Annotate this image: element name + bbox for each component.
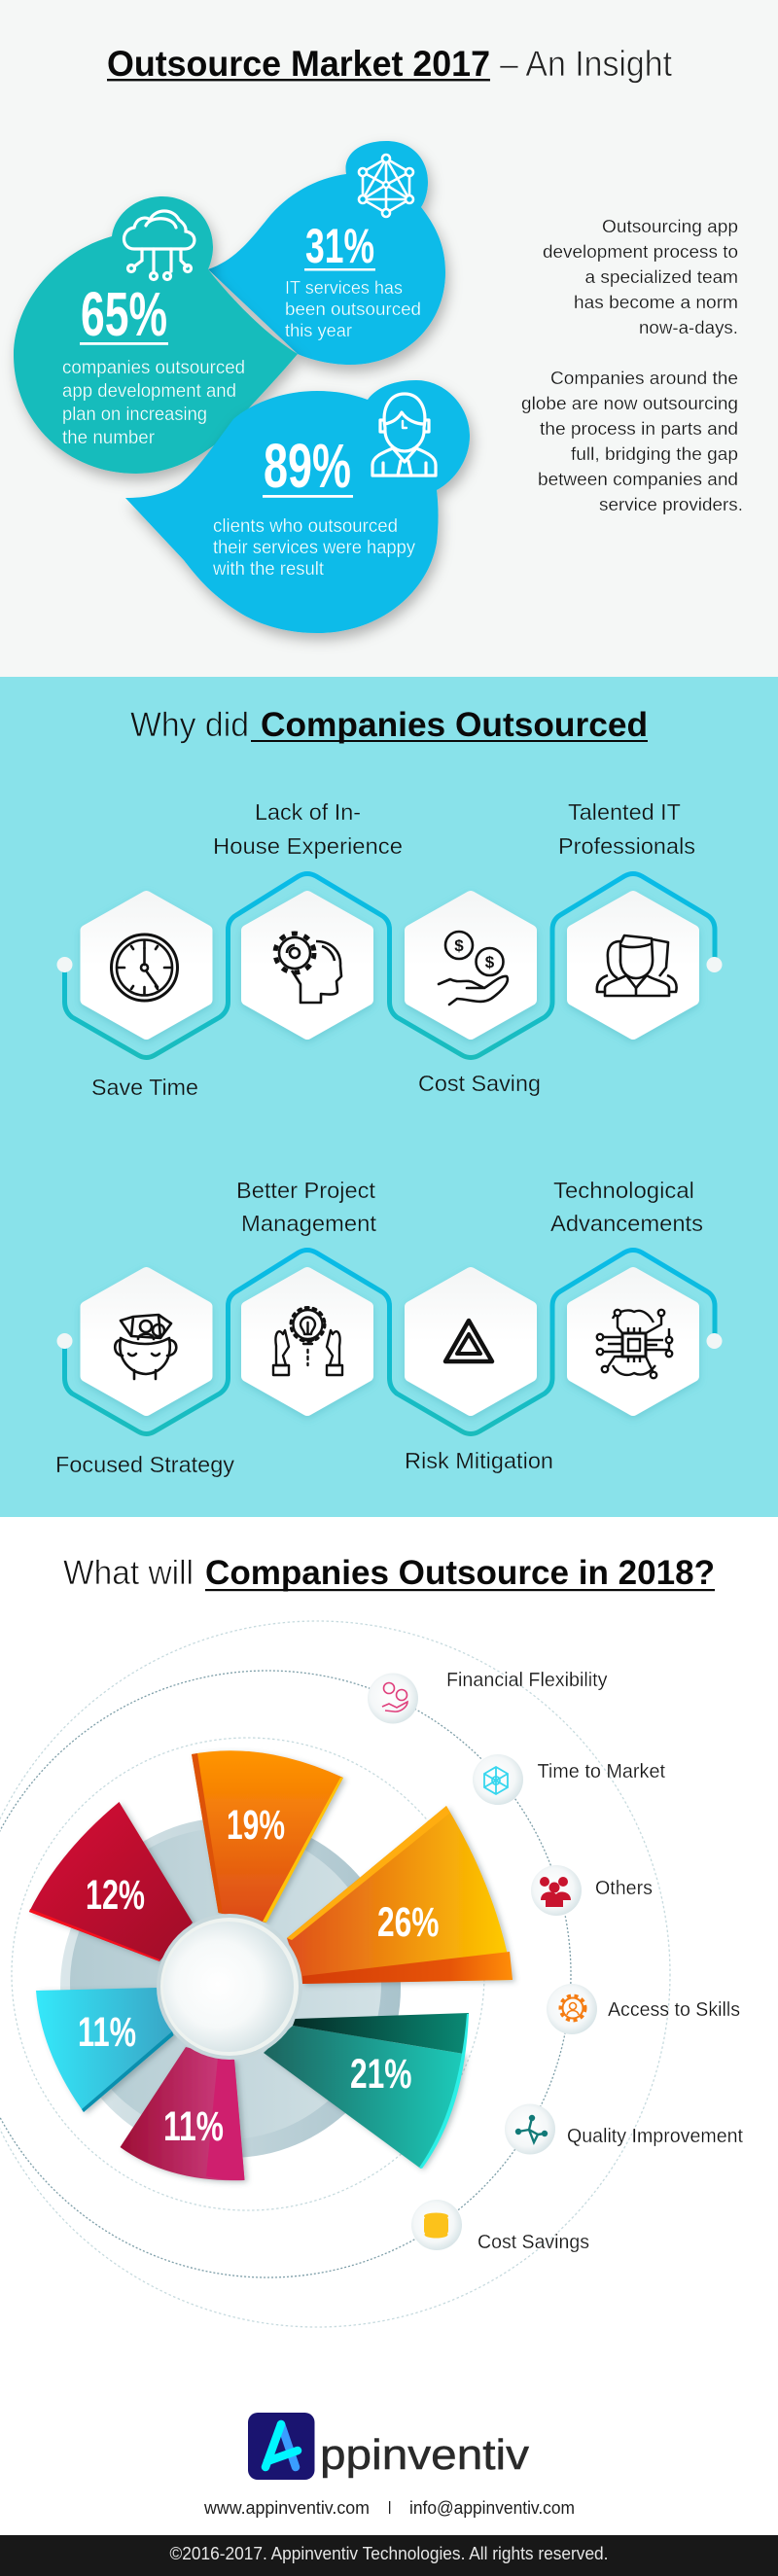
reason: project management bbox=[236, 1178, 377, 1410]
legend: cost savings bbox=[411, 2200, 589, 2253]
text: intro paragraphs: has become a norm bbox=[574, 292, 738, 312]
label: in-house experience: House Experience bbox=[213, 833, 403, 859]
label: talented professionals: Professionals bbox=[558, 833, 695, 859]
text: intro paragraphs: development process to bbox=[543, 241, 738, 262]
text: intro paragraphs: Companies around the bbox=[550, 368, 738, 388]
icon: head with network bbox=[115, 1315, 176, 1379]
text: companies outsourced: the number bbox=[62, 428, 156, 448]
heading: why: Companies Outsourced bbox=[261, 706, 648, 744]
text: companies outsourced bbox=[62, 358, 245, 448]
label: save time: Save Time bbox=[91, 1075, 198, 1100]
text: clients bbox=[212, 516, 415, 580]
copyright: ©2016-2017. Appinventiv Technologies. All rights reserved. bbox=[169, 2543, 609, 2563]
title: Outsource Market 2017 bbox=[107, 44, 490, 84]
connector track: row 2 bbox=[56, 1251, 722, 1433]
icon: coin stack bbox=[424, 2213, 448, 2239]
label: technological advancements: Technological bbox=[553, 1178, 694, 1203]
icon: chip brain bbox=[597, 1310, 672, 1378]
icon: people red bbox=[540, 1877, 571, 1907]
wordmark: ppinventiv bbox=[320, 2431, 529, 2479]
label: cost saving: Cost Saving bbox=[418, 1071, 541, 1096]
blob: 89% clients bbox=[125, 380, 470, 633]
label: project management: Management bbox=[241, 1211, 377, 1236]
legend: financial flexibility bbox=[368, 1670, 607, 1723]
label: project management: Better Project bbox=[236, 1178, 376, 1203]
label: quality improvement: Quality Improvement bbox=[567, 2126, 743, 2147]
logo bbox=[248, 2413, 529, 2480]
heading: 2018: What will bbox=[63, 1554, 194, 1592]
label: technological advancements bbox=[550, 1178, 703, 1236]
panel: market overview bbox=[0, 0, 778, 677]
text: companies outsourced: app development and bbox=[62, 381, 236, 402]
blob: 65% app development bbox=[14, 196, 298, 474]
wedge: 26%: 26% bbox=[377, 1899, 440, 1946]
contact line: info@appinventiv.com bbox=[409, 2498, 575, 2518]
stat: 65% bbox=[80, 279, 168, 349]
label: in-house experience bbox=[213, 799, 403, 859]
label: focused strategy: Focused Strategy bbox=[55, 1452, 235, 1477]
wedge: 12%: 12% bbox=[86, 1872, 145, 1919]
reason: save time bbox=[86, 897, 206, 1100]
label: talented professionals: Talented IT bbox=[568, 799, 681, 825]
wedge: 26% bbox=[287, 1806, 513, 1984]
icon: coins and hand: $ bbox=[454, 936, 464, 955]
wedge: 21%: 21% bbox=[350, 2051, 412, 2098]
legend: access to skills bbox=[547, 1984, 740, 2034]
text: companies outsourced: companies outsourced bbox=[62, 358, 245, 378]
reason: in-house experience bbox=[213, 799, 403, 1034]
pie chart bbox=[29, 1750, 513, 2180]
wedge: 19%: 19% bbox=[227, 1802, 285, 1849]
text: intro paragraphs: a specialized team bbox=[585, 266, 738, 287]
panel: what will companies outsource bbox=[0, 1517, 778, 2535]
icon: double triangle bbox=[445, 1321, 492, 1361]
text: intro paragraphs: full, bridging the gap bbox=[571, 443, 738, 464]
label: financial flexibility: Financial Flexibility bbox=[446, 1670, 607, 1691]
icon: nodes teal bbox=[516, 2116, 547, 2142]
icon: coins and hand: $ bbox=[485, 953, 495, 971]
reason: cost saving bbox=[410, 897, 541, 1096]
wedge: 12% bbox=[29, 1802, 193, 1961]
text: intro paragraphs: globe are now outsourcing bbox=[521, 393, 738, 413]
icon: coins and hand bbox=[439, 932, 508, 1005]
reason: talented professionals bbox=[558, 799, 695, 1034]
text: intro paragraphs: Outsourcing app bbox=[602, 216, 738, 236]
label: time to market: Time to Market bbox=[537, 1761, 665, 1782]
icon: businessman bbox=[372, 394, 436, 476]
text: intro paragraphs bbox=[521, 216, 743, 514]
icon: cloud circuit bbox=[124, 211, 194, 280]
text: intro paragraphs: now-a-days. bbox=[639, 317, 738, 337]
legend: quality improvement bbox=[505, 2104, 743, 2155]
text: clients: with the result bbox=[212, 559, 325, 580]
dotted orbit rings bbox=[0, 1621, 670, 2327]
icon: gear head bbox=[275, 934, 341, 1003]
stat: 31%: 31% bbox=[305, 219, 374, 273]
icon: coins hand pink bbox=[382, 1682, 407, 1711]
text: clients: clients who outsourced bbox=[213, 516, 398, 537]
reason: focused strategy bbox=[55, 1273, 235, 1477]
icon: hexagon cluster bbox=[484, 1767, 508, 1794]
label: access to skills: Access to Skills bbox=[608, 1999, 740, 2021]
footer bar bbox=[0, 2535, 778, 2576]
legend: time to market bbox=[473, 1754, 665, 1805]
wedge: 11% pink: 11% bbox=[163, 2103, 224, 2150]
text: intro paragraphs: the process in parts and bbox=[540, 418, 738, 439]
contact line bbox=[203, 2498, 575, 2518]
panel: why companies outsourced bbox=[0, 677, 778, 1517]
stat: 89%: 89% bbox=[264, 431, 351, 501]
wedge: 11% cyan bbox=[36, 1988, 173, 2112]
text: IT services: IT services has bbox=[285, 278, 403, 298]
icon: bulb and hands bbox=[273, 1307, 342, 1375]
label: others: Others bbox=[595, 1878, 653, 1899]
text: intro paragraphs: service providers. bbox=[599, 494, 743, 514]
blob: 31% IT services bbox=[208, 141, 445, 365]
label: talented professionals bbox=[558, 799, 695, 859]
text: IT services: this year bbox=[285, 321, 352, 340]
text: IT services bbox=[285, 278, 421, 340]
wedge: 21% bbox=[264, 2013, 469, 2169]
connector end dots: row 1 bbox=[56, 957, 722, 972]
icon: team bbox=[597, 935, 677, 996]
chart base disc bbox=[60, 1817, 401, 2158]
label: risk mitigation: Risk Mitigation bbox=[405, 1448, 553, 1473]
wedge: 11% cyan: 11% bbox=[78, 2009, 136, 2056]
text: IT services: been outsourced bbox=[285, 300, 421, 319]
heading: 2018: Companies Outsource in 2018? bbox=[205, 1554, 715, 1592]
chart hub bbox=[157, 1914, 302, 2060]
connector track: row 1 bbox=[64, 873, 715, 1058]
icon: network bbox=[359, 155, 413, 217]
wedge: 19% bbox=[192, 1750, 343, 1923]
wedge: 11% pink bbox=[121, 2047, 245, 2180]
reason: technological advancements bbox=[550, 1178, 703, 1410]
label: project management bbox=[236, 1178, 377, 1236]
contact line: www.appinventiv.com bbox=[203, 2498, 370, 2518]
icon: gear orange bbox=[560, 1995, 585, 2021]
label: technological advancements: Advancements bbox=[550, 1211, 703, 1236]
label: in-house experience: Lack of In- bbox=[255, 799, 361, 825]
text: intro paragraphs: between companies and bbox=[538, 469, 738, 489]
label: cost savings: Cost Savings bbox=[477, 2232, 589, 2253]
stat: 65%: 65% bbox=[81, 279, 167, 349]
text: companies outsourced: plan on increasing bbox=[62, 405, 207, 425]
icon: letter A mark bbox=[265, 2424, 298, 2467]
title: – An Insight bbox=[500, 44, 673, 84]
legend: others bbox=[531, 1865, 653, 1916]
heading: why: Why did bbox=[130, 706, 249, 744]
icon: clock bbox=[111, 935, 177, 1001]
reason: risk mitigation bbox=[405, 1273, 553, 1473]
text: clients: their services were happy bbox=[213, 538, 415, 558]
